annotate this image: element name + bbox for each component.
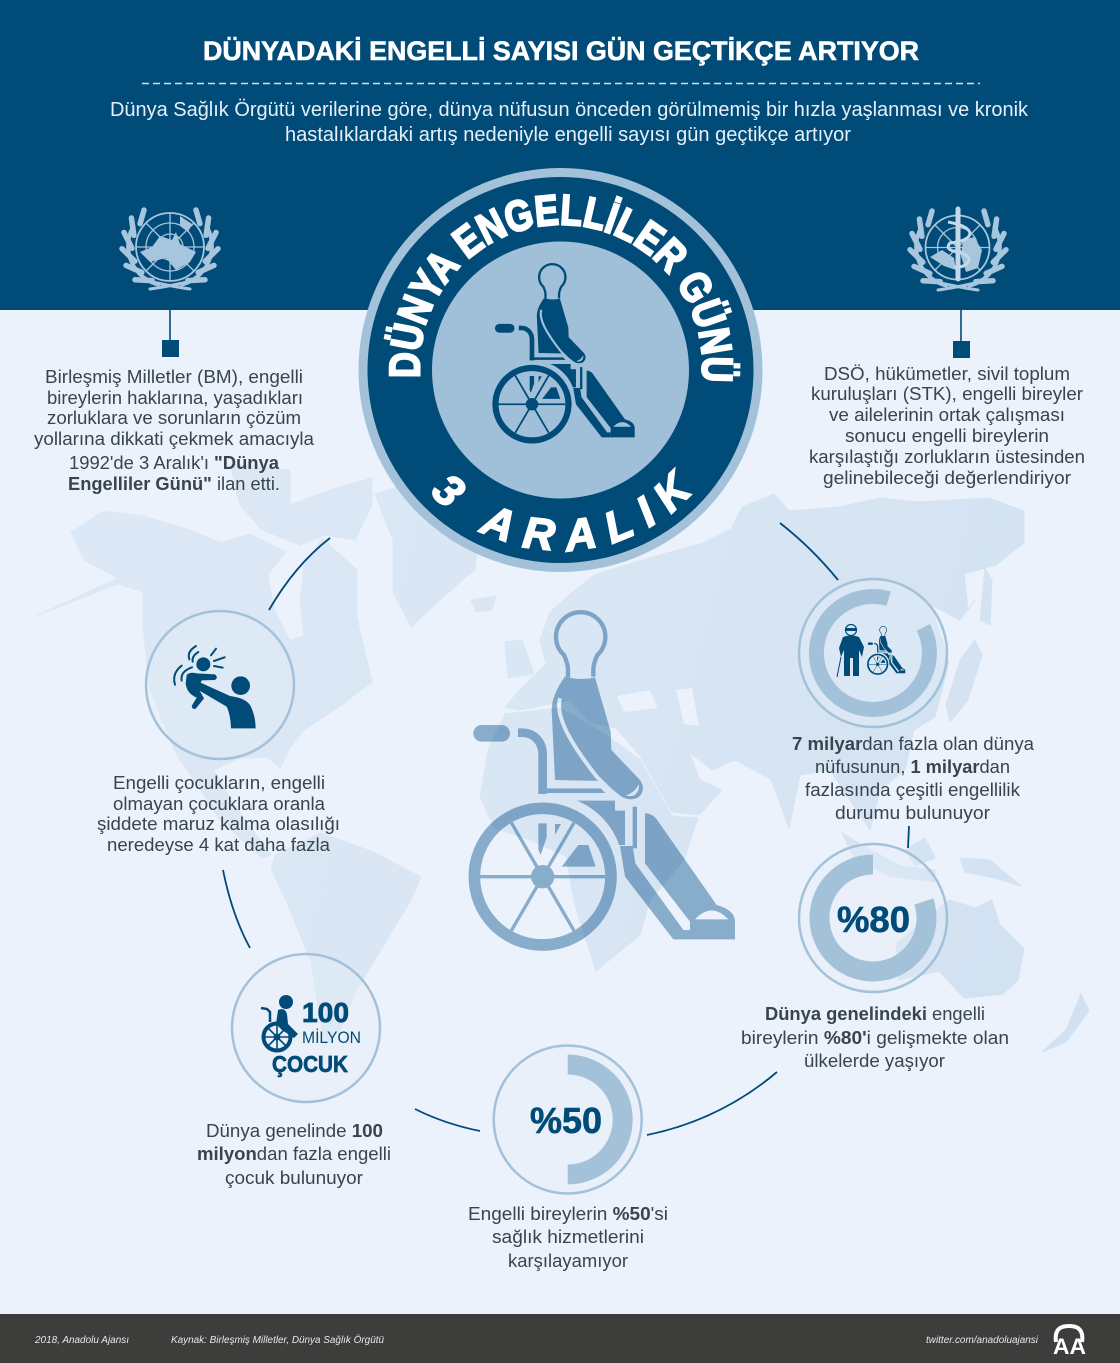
badge heading: DÜNYA ENGELLİLER GÜNÜ (384, 194, 740, 382)
panel: 80 percent chart: %80 (837, 899, 910, 940)
text block: 80 percent: bireylerin %80'i gelişmekte olan (741, 1028, 1009, 1048)
panel: 7 billion population (799, 579, 947, 727)
icon: wheelchair user (868, 626, 905, 674)
marker: left connector (162, 310, 179, 357)
icon: wheelchair in badge (495, 264, 635, 440)
panel: violence against children (146, 611, 294, 759)
footer: 2018, Anadolu Ajansı (34, 1335, 129, 1346)
text block: 50 percent: Engelli bireylerin %50'si (468, 1204, 668, 1224)
text block: 7 billion (792, 734, 1035, 823)
text block: 7 billion: nüfusunun, 1 milyardan (815, 757, 1010, 777)
connecting arcs (223, 523, 909, 1135)
badge date: 3 ARALIK (432, 466, 693, 552)
text block: UN declaration: Engelliler Günü" ilan etti. (68, 474, 280, 494)
footer: twitter.com/anadoluajansi (926, 1335, 1039, 1346)
text block: UN declaration: zorluklara ve sorunların çözüm (47, 408, 301, 428)
panel: 100 million children: MİLYON (302, 1028, 361, 1047)
panel: 50 percent chart: %50 (530, 1100, 602, 1141)
icon: child in wheelchair (261, 995, 298, 1050)
title: DÜNYADAKİ ENGELLİ SAYISI GÜN GEÇTİKÇE ARTIYOR (203, 36, 919, 66)
text block: WHO assessment: sonucu engelli bireylerin (845, 426, 1049, 446)
text block: 7 billion: fazlasında çeşitli engellilik (805, 780, 1021, 800)
panel: 100 million children: ÇOCUK (272, 1051, 348, 1077)
text block: 100 million: çocuk bulunuyor (225, 1168, 363, 1188)
text block: WHO assessment: DSÖ, hükümetler, sivil toplum (824, 364, 1070, 384)
icon: World Health Organization emblem (910, 209, 1006, 290)
text block: UN declaration: 1992'de 3 Aralık'ı "Dünya (69, 453, 280, 473)
text block: WHO assessment: ve ailelerinin ortak çalışması (829, 405, 1065, 425)
text block: 50 percent (468, 1204, 668, 1271)
panel: 80 percent chart (799, 844, 947, 992)
text block: UN declaration: bireylerin haklarına, yaşadıkları (47, 388, 303, 408)
text block: 80 percent: ülkelerde yaşıyor (804, 1051, 945, 1071)
icon: United Nations emblem (122, 210, 218, 289)
icon: blind person (837, 624, 864, 677)
text block: 50 percent: karşılayamıyor (508, 1251, 628, 1271)
panel: 50 percent chart (494, 1046, 642, 1194)
footer (0, 1314, 1120, 1363)
text block: WHO assessment: gelinebileceği değerlendiriyor (823, 468, 1071, 488)
subtitle: Dünya Sağlık Örgütü verilerine göre, dünya nüfusun önceden görülmemiş bir hızla yaşlanması ve kronik (110, 99, 1029, 121)
badge: Dünya Engelliler Günü (358, 168, 762, 572)
text block: WHO assessment: karşılaştığı zorlukların üstesinden (809, 447, 1085, 467)
text block: UN declaration: Birleşmiş Milletler (BM), engelli (45, 367, 303, 387)
text block: violence: şiddete maruz kalma olasılığı (97, 814, 340, 834)
panel: 100 million children: 100 (302, 997, 349, 1028)
text block: violence: Engelli çocukların, engelli (113, 773, 325, 793)
icon: large central wheelchair (473, 612, 735, 945)
text block: WHO assessment (809, 364, 1085, 488)
text block: 50 percent: sağlık hizmetlerini (492, 1227, 644, 1247)
text block: 100 million: milyondan fazla engelli (197, 1144, 391, 1164)
text block: 80 percent: Dünya genelindeki engelli (765, 1004, 985, 1024)
icon: adult hitting child (174, 646, 256, 728)
text block: UN declaration (34, 367, 315, 494)
text block: WHO assessment: kuruluşları (STK), engelli bireyler (811, 384, 1083, 404)
subtitle: hastalıklardaki artış nedeniyle engelli sayısı gün geçtikçe artıyor (285, 124, 851, 146)
subtitle (110, 99, 1029, 146)
header band (0, 0, 1120, 310)
marker: right connector (953, 310, 970, 358)
text block: 100 million (197, 1121, 391, 1188)
text block: 100 million: Dünya genelinde 100 (206, 1121, 383, 1141)
text block: UN declaration: yollarına dikkati çekmek amacıyla (34, 429, 315, 449)
panel: 100 million children (232, 954, 380, 1102)
text block: violence (97, 773, 340, 855)
text block: violence: neredeyse 4 kat daha fazla (107, 835, 331, 855)
text block: 7 billion: durumu bulunuyor (835, 803, 990, 823)
footer: Kaynak: Birleşmiş Milletler, Dünya Sağlık Örgütü (171, 1334, 384, 1346)
text block: 7 billion: 7 milyardan fazla olan dünya (792, 734, 1035, 754)
world map background (36, 464, 1089, 1052)
icon: Anadolu Agency logo: AA (1053, 1334, 1086, 1359)
text block: 80 percent (741, 1004, 1009, 1071)
text block: violence: olmayan çocuklara oranla (113, 794, 326, 814)
